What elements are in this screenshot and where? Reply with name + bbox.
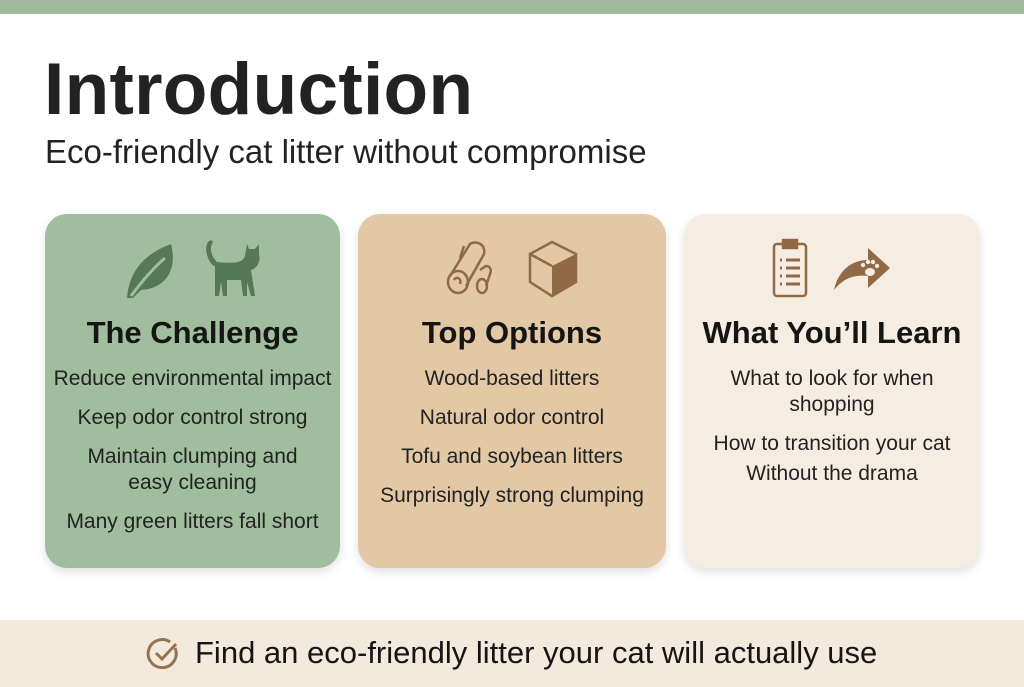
icons: leaf and cat (127, 240, 260, 298)
text block: Maintain clumping and (87, 445, 298, 468)
text block: Surprisingly strong clumping (380, 484, 644, 507)
heading: The Challenge (87, 315, 298, 350)
text block: shopping (789, 393, 875, 416)
subtitle: Eco-friendly cat litter without compromise (45, 133, 647, 170)
title: Introduction (44, 49, 473, 130)
text block: Wood-based litters (425, 367, 599, 390)
top bar (0, 0, 1024, 14)
text block: Reduce environmental impact (54, 367, 331, 390)
panel: the challenge (45, 214, 340, 568)
panel: top options (358, 214, 666, 568)
text block (380, 367, 644, 507)
callout text: Find an eco-friendly litter your cat will actually use (195, 635, 877, 670)
icons: wood log and cube (446, 240, 578, 298)
text block: Without the drama (746, 462, 918, 485)
text block: Natural odor control (420, 406, 604, 429)
text block: How to transition your cat (714, 432, 950, 455)
footer band (0, 620, 1024, 687)
text block: Tofu and soybean litters (401, 445, 623, 468)
text block: Keep odor control strong (78, 406, 307, 429)
icons: clipboard and paw arrow (772, 238, 890, 298)
text block (54, 367, 332, 533)
text block: Many green litters fall short (66, 510, 319, 533)
text block: What to look for when (730, 367, 934, 390)
heading: Top Options (422, 315, 602, 350)
icon: check circle (146, 638, 178, 670)
panel: what you'll learn (684, 214, 980, 568)
heading: What You’ll Learn (703, 315, 961, 350)
text block: easy cleaning (128, 471, 257, 494)
text block (714, 367, 950, 485)
